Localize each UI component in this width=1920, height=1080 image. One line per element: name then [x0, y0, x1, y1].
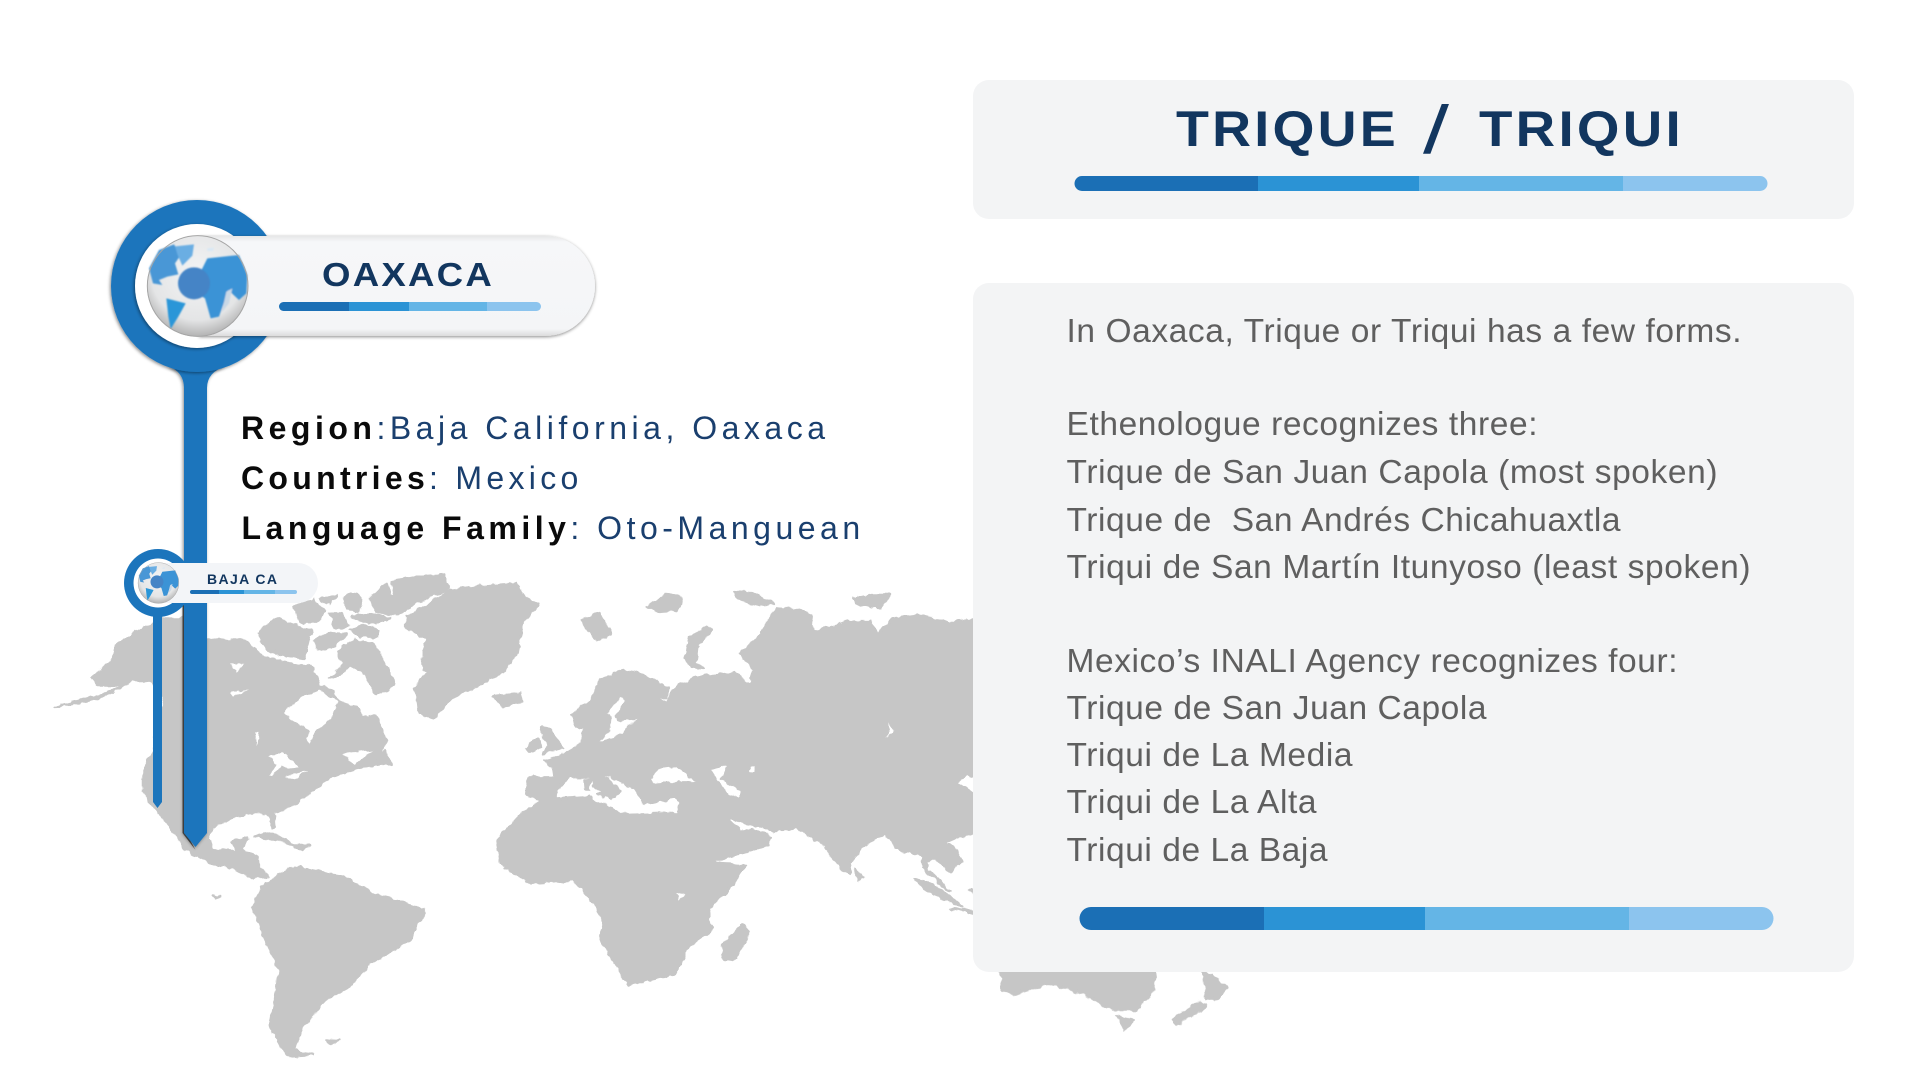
pin label pill: [199, 236, 595, 336]
landmass: australia and new zealand: [1001, 967, 1227, 1030]
text block: ethnologue list: Ethenologue recognizes three:: [1066, 406, 1538, 443]
panel: title: [973, 80, 1854, 219]
text block: inali list: [1066, 643, 1678, 869]
heading: Trique / Triqui: [1176, 92, 1684, 168]
text block: ethnologue list: Triqui de San Martín Itunyoso (least spoken): [1066, 549, 1750, 586]
icon: small globe: [138, 562, 179, 603]
text block: inali list: Trique de San Juan Capola: [1066, 690, 1487, 727]
text block: ethnologue list: Trique de San Juan Capola (most spoken): [1066, 454, 1718, 491]
language facts: Countries: Mexico: [241, 460, 583, 496]
heading: Trique / Triqui: TRIQUE: [1176, 101, 1399, 157]
language facts: [241, 410, 865, 546]
progress bar: oaxaca: [279, 302, 541, 311]
text block: inali list: Triqui de La Baja: [1066, 832, 1328, 869]
progress bar: bottom: [1080, 907, 1774, 930]
pin: baja california: [124, 549, 318, 808]
label: Oaxaca: OAXACA: [322, 256, 494, 293]
text block: inali list: Triqui de La Alta: [1066, 784, 1317, 821]
landmass: africa and south america: [213, 797, 749, 1057]
text block: inali list: Triqui de La Media: [1066, 737, 1353, 774]
language facts: Region:Baja California, Oaxaca: [241, 410, 830, 446]
landmass: eurasia: [527, 592, 980, 915]
heading: Trique / Triqui: TRIQUI: [1479, 101, 1684, 157]
icon: globe: [147, 235, 248, 337]
text block: inali list: Mexico’s INALI Agency recognizes four:: [1066, 643, 1678, 680]
landmass: north america: [55, 575, 450, 878]
small pin label pill: [158, 563, 318, 603]
pin: oaxaca: [111, 200, 595, 850]
text block: intro: In Oaxaca, Trique or Triqui has a few forms.: [1066, 313, 1742, 350]
text block: ethnologue list: Trique de San Andrés Chicahuaxtla: [1066, 502, 1621, 539]
panel: description: [973, 283, 1854, 972]
world map: [55, 575, 1227, 1057]
language facts: Language Family: Oto-Manguean: [242, 510, 865, 546]
landmass: greenland and iceland: [407, 583, 538, 718]
progress bar: title: [1075, 176, 1768, 191]
pin stem and ring: [111, 200, 283, 850]
small pin stem and ring: [124, 549, 192, 808]
label: Baja CA: BAJA CA: [207, 571, 277, 587]
progress bar: baja: [190, 590, 297, 594]
heading: Trique / Triqui: /: [1423, 92, 1449, 168]
text block: ethnologue list: [1066, 406, 1750, 586]
